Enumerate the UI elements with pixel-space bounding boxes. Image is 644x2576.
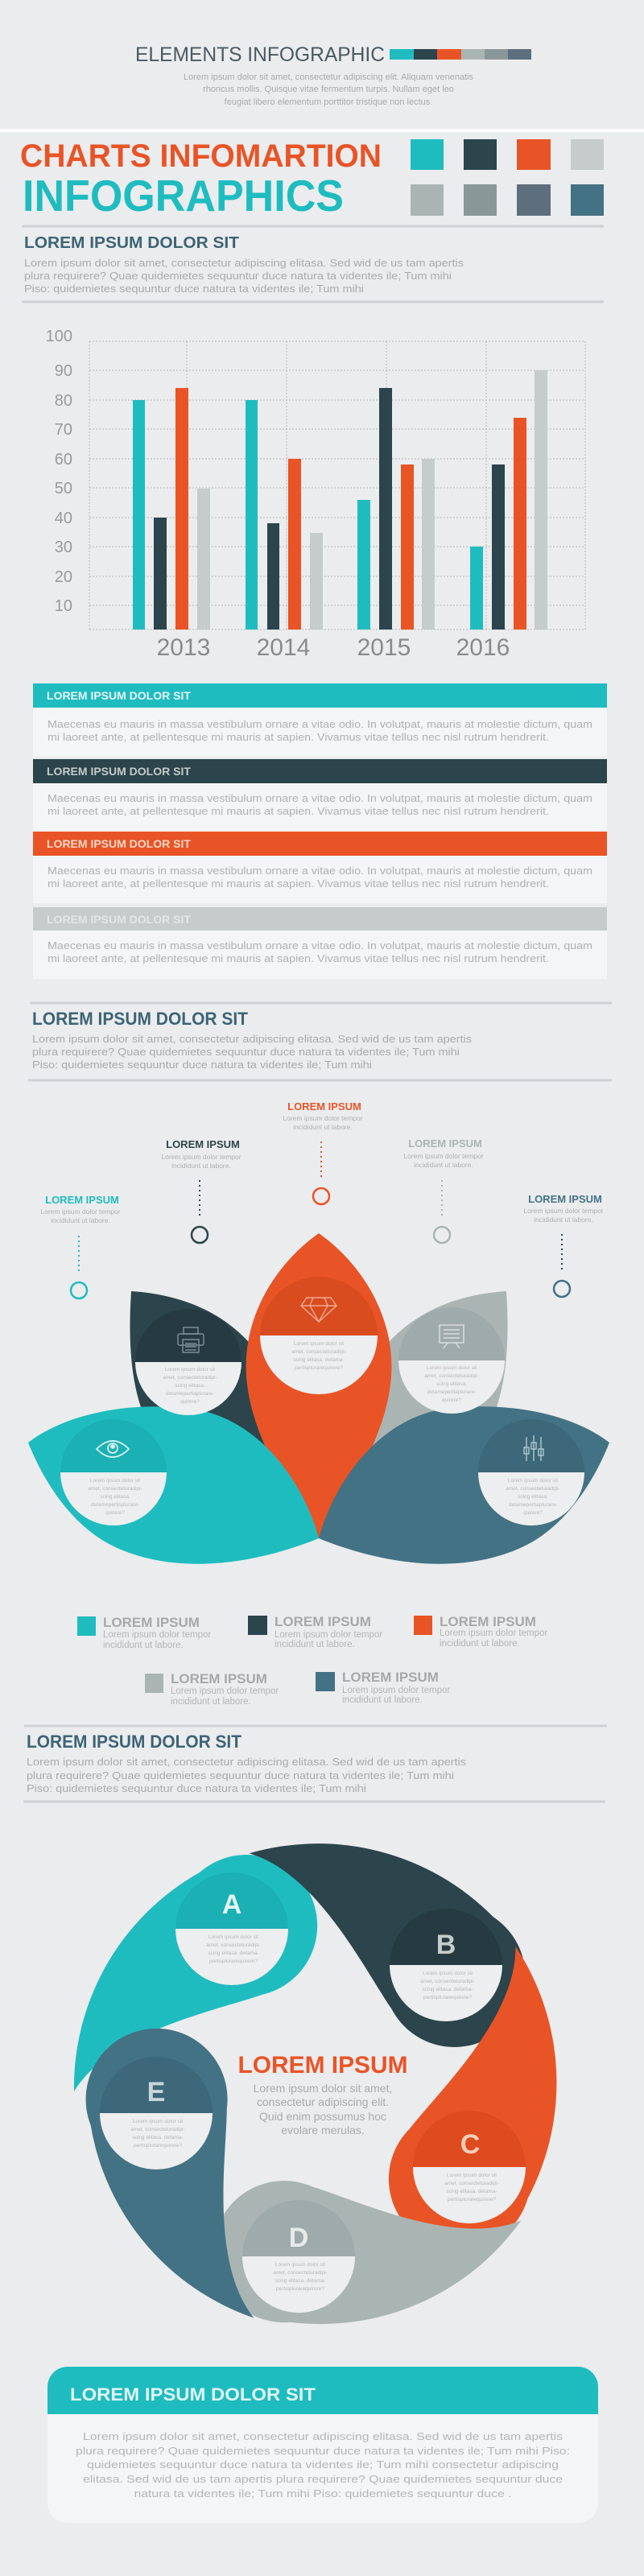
lotus petal chart: quirere?: [442, 1397, 461, 1403]
lotus petal chart: scing elitasa.: [436, 1381, 467, 1387]
circle E: scing elitasa. detama-: [132, 2135, 184, 2140]
icon: printer: [178, 1327, 204, 1352]
dark circle: [135, 1309, 242, 1362]
petal labels: [40, 1100, 604, 1298]
circle D: scing elitasa. detama-: [275, 2278, 326, 2284]
panel: orange text: [33, 832, 607, 903]
lotus petal chart: Lorem ipsum dolor sit: [427, 1365, 477, 1371]
text block 2: [32, 1009, 472, 1071]
bar chart: 2013: [157, 634, 210, 661]
lotus petal chart: amet, consecteturadipi-: [506, 1486, 560, 1492]
spiral center text: [238, 2052, 407, 2136]
color swatches: [411, 139, 604, 216]
legend: LOREM IPSUM: [440, 1614, 536, 1629]
petal labels: LOREM IPSUM: [287, 1100, 361, 1113]
panel: teal text: [33, 683, 607, 757]
circle D: amet, consecteturadipi-: [273, 2270, 328, 2276]
bottom callout box: LOREM IPSUM DOLOR SIT: [70, 2384, 316, 2405]
petal labels: LOREM IPSUM: [166, 1138, 240, 1150]
text block 2: LOREM IPSUM DOLOR SIT: [32, 1009, 249, 1029]
circle E: Lorem ipsum dolor sit: [133, 2119, 183, 2124]
circle C: C: [460, 2129, 480, 2160]
circle E: pertisplurarequirere?: [134, 2143, 182, 2149]
legend: Lorem ipsum dolor tempor: [103, 1630, 211, 1640]
legend: LOREM IPSUM: [275, 1614, 371, 1629]
lotus petal chart: scing elitasa.: [175, 1383, 205, 1389]
circle B: B: [436, 1930, 456, 1960]
legend: Lorem ipsum dolor tempor: [440, 1629, 547, 1638]
bar chart: 2014: [257, 634, 310, 661]
petal labels: Lorem ipsum dolor tempor: [40, 1208, 121, 1216]
lotus petal chart: pertisplurarequirere?: [295, 1365, 343, 1371]
petal labels: Lorem ipsum dolor tempor: [523, 1207, 604, 1215]
teal circle: [60, 1419, 167, 1472]
icon: diamond: [301, 1298, 336, 1322]
panel: dark text: Maecenas eu mauris in massa vestibulum ornare a vitae odio. In volutpat, mauris at molestie dictum, quam: [47, 793, 592, 804]
lotus petal chart: Lorem ipsum dolor sit: [165, 1367, 215, 1373]
header: elements infographic: rhoncus mollis. Quisque vitae fermentum turpis. Nullam eget leo: [203, 85, 454, 94]
lotus petal chart: scing elitasa.: [100, 1494, 130, 1500]
text block 3: plura requirere? Quae quidemietes sequuntur duce natura ta videntes ile; Tum mihi: [27, 1770, 454, 1781]
bar chart: 2015: [357, 634, 411, 661]
title: INFOGRAPHICS: [23, 171, 344, 221]
intro text block: LOREM IPSUM DOLOR SIT: [24, 234, 239, 252]
legend: [77, 1614, 547, 1707]
icon: sliders: [524, 1435, 543, 1461]
bar chart: 80: [55, 392, 72, 410]
lotus petal chart: [28, 1233, 609, 1564]
lotus petal chart: amet, consecteturadipi-: [291, 1349, 346, 1355]
text block 2: plura requirere? Quae quidemietes sequuntur duce natura ta videntes ile; Tum mihi: [32, 1046, 460, 1058]
petal labels: incididunt ut labore.: [51, 1216, 110, 1224]
bar chart: 10: [55, 597, 72, 615]
intro text block: Piso: quidemietes sequuntur duce natura ta videntes ile; Tum mihi: [24, 283, 364, 295]
panel: orange text: LOREM IPSUM DOLOR SIT: [47, 837, 191, 850]
lotus petal chart: detamepertisplurare-: [91, 1502, 139, 1508]
bar chart: 90: [55, 362, 72, 380]
legend: LOREM IPSUM: [103, 1615, 200, 1630]
petal labels: incididunt ut labore.: [293, 1123, 353, 1131]
petal labels: incididunt ut labore.: [534, 1216, 593, 1224]
circle A: pertisplurarequirere?: [209, 1959, 258, 1964]
circle E: E: [147, 2077, 165, 2107]
intro text block: Lorem ipsum dolor sit amet, consectetur adipiscing elitasa. Sed wid de us tam apertis: [24, 258, 464, 269]
spiral center text: evolare merulas.: [281, 2124, 365, 2136]
lotus petal chart: scing elitasa.: [518, 1494, 548, 1500]
bottom callout box: quidemietes sequuntur duce natura ta videntes ile; Tum mihi consectetur adipiscing: [87, 2458, 559, 2471]
circle B: Lorem ipsum dolor sit: [423, 1971, 473, 1976]
bottom callout box: [47, 2367, 598, 2523]
circle B: pertisplurarequirere?: [423, 1995, 472, 2000]
panel: orange text: Maecenas eu mauris in massa vestibulum ornare a vitae odio. In volutpat, mauris at molestie dictum, quam: [47, 865, 592, 877]
legend: Lorem ipsum dolor tempor: [342, 1686, 450, 1695]
petal labels: incididunt ut labore.: [414, 1161, 473, 1169]
circle E: amet, consecteturadipi-: [130, 2127, 185, 2132]
legend: incididunt ut labore.: [103, 1641, 184, 1650]
lotus petal chart: scing elitasa. detama-: [293, 1357, 345, 1363]
panel: gray text: mi laoreet ante, at pellentesque mi mauris at sapien. Vivamus vitae tellus nec nisl rutrum hendrerit.: [47, 953, 549, 964]
circle D: D: [289, 2223, 308, 2253]
orange circle: [260, 1277, 378, 1335]
legend: incididunt ut labore.: [171, 1697, 251, 1707]
petal labels: Lorem ipsum dolor tempor: [161, 1153, 242, 1161]
lotus petal chart: quirere?: [105, 1510, 125, 1516]
gray circle: [398, 1307, 505, 1360]
circle B: scing elitasa. detama-: [422, 1987, 473, 1992]
lotus petal chart: quirere?: [180, 1399, 200, 1405]
petal labels: Lorem ipsum dolor tempor: [283, 1114, 363, 1122]
circle A: amet, consecteturadipi-: [206, 1942, 261, 1948]
spiral cycle diagram: [31, 1791, 643, 2411]
spiral center text: consectetur adipiscing elit.: [257, 2095, 389, 2108]
panel: gray text: Maecenas eu mauris in massa vestibulum ornare a vitae odio. In volutpat, mauris at molestie dictum, quam: [47, 940, 592, 952]
panel: dark text: mi laoreet ante, at pellentesque mi mauris at sapien. Vivamus vitae tellus nec nisl rutrum hendrerit.: [47, 806, 549, 817]
lotus petal chart: Lorem ipsum dolor sit: [508, 1478, 558, 1484]
lotus petal chart: detamepertiaplurare-: [509, 1502, 557, 1508]
text block 3: Piso: quidemietes sequuntur duce natura ta videntes ile; Tum mihi: [27, 1783, 366, 1794]
bar chart: 20: [55, 568, 72, 586]
bar chart: 70: [55, 421, 72, 439]
legend: incididunt ut labore.: [440, 1639, 520, 1649]
circle D: [242, 2200, 355, 2313]
spiral center text: Lorem ipsum dolor sit amet,: [254, 2082, 392, 2095]
bar chart: 60: [55, 451, 72, 469]
text block 3: Lorem ipsum dolor sit amet, consectetur adipiscing elitasa. Sed wid de us tam apertis: [27, 1757, 466, 1768]
circle C: scing elitasa. detama-: [446, 2189, 497, 2194]
title: [20, 138, 382, 221]
header: elements infographic: Lorem ipsum dolor sit amet, consectetur adipiscing elit. Aliquam venenatis: [184, 72, 474, 82]
panel: teal text: LOREM IPSUM DOLOR SIT: [47, 689, 191, 702]
text block 2: Lorem ipsum dolor sit amet, consectetur adipiscing elitasa. Sed wid de us tam apertis: [32, 1034, 472, 1045]
header: elements infographic: [135, 43, 531, 107]
panel: dark text: [33, 759, 607, 832]
lotus petal chart: amet, consecteturadipi-: [163, 1375, 217, 1381]
circle D: Lorem ipsum dolor sit: [275, 2262, 325, 2268]
circle A: [175, 1872, 288, 1985]
bottom callout box: plura requirere? Quae quidemietes sequuntur duce natura ta videntes ile; Tum mihi Piso:: [76, 2445, 570, 2457]
panel: orange text: mi laoreet ante, at pellentesque mi mauris at sapien. Vivamus vitae tellus nec nisl rutrum hendrerit.: [47, 878, 549, 890]
legend: incididunt ut labore.: [342, 1695, 423, 1705]
legend: Lorem ipsum dolor tempor: [171, 1686, 279, 1696]
lotus petal chart: detamepertiaplurare-: [166, 1391, 214, 1397]
text block 2: Piso: quidemietes sequuntur duce natura ta videntes ile; Tum mihi: [32, 1059, 372, 1071]
legend: LOREM IPSUM: [171, 1671, 267, 1686]
circle C: [413, 2111, 526, 2223]
text block 3: LOREM IPSUM DOLOR SIT: [27, 1732, 242, 1752]
lotus petal chart: detamepertiaplurare-: [427, 1389, 476, 1395]
panel: teal text: mi laoreet ante, at pellentesque mi mauris at sapien. Vivamus vitae tellus nec nisl rutrum hendrerit.: [47, 732, 549, 743]
bottom callout box: natura ta videntes ile; Tum mihi Piso: quidemietes sequuntur duce .: [134, 2487, 512, 2500]
circle E: [100, 2057, 213, 2169]
circle C: amet, consecteturadipi-: [444, 2181, 499, 2186]
petal labels: LOREM IPSUM: [45, 1194, 119, 1206]
title: CHARTS INFOMARTION: [20, 138, 382, 174]
circle B: [390, 1909, 502, 2021]
intro text block: [24, 234, 464, 295]
icon: presentation board: [440, 1325, 464, 1348]
petal labels: incididunt ut labore.: [171, 1162, 231, 1170]
circle A: A: [222, 1889, 242, 1920]
lotus petal chart: amet, consecteturadipi-: [424, 1373, 479, 1379]
lotus petal chart: amet, consecteturadipi-: [88, 1486, 142, 1492]
bar chart: [46, 328, 585, 661]
bar chart: 30: [55, 539, 72, 556]
petal labels: Lorem ipsum dolor tempor: [403, 1152, 484, 1160]
circle A: Lorem ipsum dolor sit: [208, 1934, 258, 1940]
legend: incididunt ut labore.: [275, 1640, 355, 1649]
bar chart: 100: [46, 328, 72, 345]
spiral center text: LOREM IPSUM: [238, 2052, 407, 2079]
petal labels: LOREM IPSUM: [528, 1193, 602, 1205]
lotus petal chart: Lorem ipsum dolor sit: [90, 1478, 140, 1484]
icon: eye: [97, 1441, 129, 1457]
bar chart: 40: [55, 510, 72, 527]
panel: dark text: LOREM IPSUM DOLOR SIT: [47, 765, 191, 778]
bottom callout box: Lorem ipsum dolor sit amet, consectetur adipiscing elitasa. Sed wid de us tam apertis: [83, 2430, 564, 2442]
bottom callout box: elitasa. Sed wid de us tam apertis plura requirere? Quae quidemietes sequuntur duce: [83, 2473, 563, 2485]
header: elements infographic: ELEMENTS INFOGRAPHIC: [135, 43, 385, 66]
circle B: amet, consecteturadipi-: [420, 1979, 475, 1984]
bar chart: 2016: [456, 634, 510, 661]
header: elements infographic: feugiat libero elementum porttitor tristique non lectus.: [225, 97, 432, 107]
intro text block: plura requirere? Quae quidemietes sequuntur duce natura ta videntes ile; Tum mihi: [24, 270, 452, 282]
panel: teal text: Maecenas eu mauris in massa vestibulum ornare a vitae odio. In volutpat, mauris at molestie dictum, quam: [47, 719, 592, 730]
circle C: pertisplurarequirere?: [448, 2197, 496, 2202]
petal labels: LOREM IPSUM: [408, 1137, 482, 1150]
bar chart: 50: [55, 480, 72, 497]
spiral center text: Quid enim possumus hoc: [259, 2110, 386, 2123]
text block 3: [27, 1732, 466, 1794]
panel: gray text: [33, 907, 607, 979]
legend: Lorem ipsum dolor tempor: [275, 1630, 382, 1640]
panel: gray text: LOREM IPSUM DOLOR SIT: [47, 913, 191, 926]
circle D: pertisplurarequirere?: [276, 2286, 324, 2292]
legend: LOREM IPSUM: [342, 1670, 439, 1685]
slate circle: [478, 1419, 584, 1472]
lotus petal chart: Lorem ipsum dolor sit: [294, 1341, 344, 1347]
circle C: Lorem ipsum dolor sit: [447, 2173, 497, 2178]
lotus petal chart: quirere?: [523, 1510, 543, 1516]
circle A: scing elitasa. detama-: [208, 1951, 259, 1956]
